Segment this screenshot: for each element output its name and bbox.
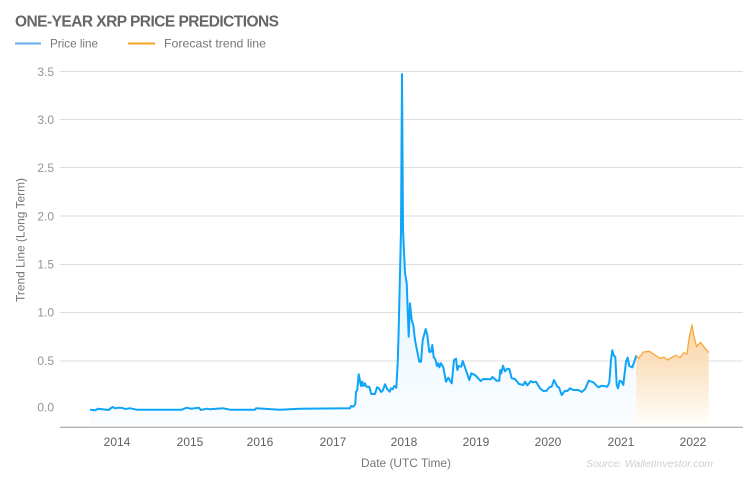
x axis tick labels: 2014	[104, 435, 131, 449]
y axis tick labels: 3.0	[37, 113, 54, 127]
forecast line	[636, 325, 709, 360]
x axis tick labels: 2020	[535, 435, 562, 449]
x axis tick labels: 2017	[320, 435, 347, 449]
x axis tick labels: 2015	[177, 435, 204, 449]
y axis tick labels: 2.0	[37, 210, 54, 224]
forecast area	[636, 325, 709, 424]
title: ONE-YEAR XRP PRICE PREDICTIONS	[15, 14, 279, 30]
legend item: forecast trend line: Forecast trend line	[164, 36, 266, 50]
legend item: price line	[15, 36, 98, 50]
x axis title: Date (UTC Time)	[361, 456, 451, 470]
y axis tick labels: 3.5	[37, 65, 54, 79]
x axis tick labels	[104, 435, 707, 449]
price line	[90, 74, 636, 410]
historical price area	[90, 74, 636, 427]
x axis tick labels: 2021	[608, 435, 635, 449]
y axis tick labels	[37, 65, 54, 414]
x axis tick labels: 2019	[463, 435, 490, 449]
x axis tick labels: 2022	[680, 435, 707, 449]
x axis tick labels: 2018	[391, 435, 418, 449]
legend item: price line: Price line	[50, 36, 98, 50]
x axis line	[60, 426, 743, 428]
y axis tick labels: 1.5	[37, 258, 54, 272]
y axis tick labels: 2.5	[37, 161, 54, 175]
y axis tick labels: 1.0	[37, 306, 54, 320]
source note: Source: WalletInvestor.com	[586, 458, 713, 470]
horizontal grid lines	[60, 72, 743, 361]
x axis tick labels: 2016	[247, 435, 274, 449]
y axis tick labels: 0.5	[37, 354, 54, 368]
y axis title: Trend Line (Long Term)	[14, 178, 28, 302]
legend	[15, 36, 266, 50]
y axis tick labels: 0.0	[37, 400, 54, 414]
